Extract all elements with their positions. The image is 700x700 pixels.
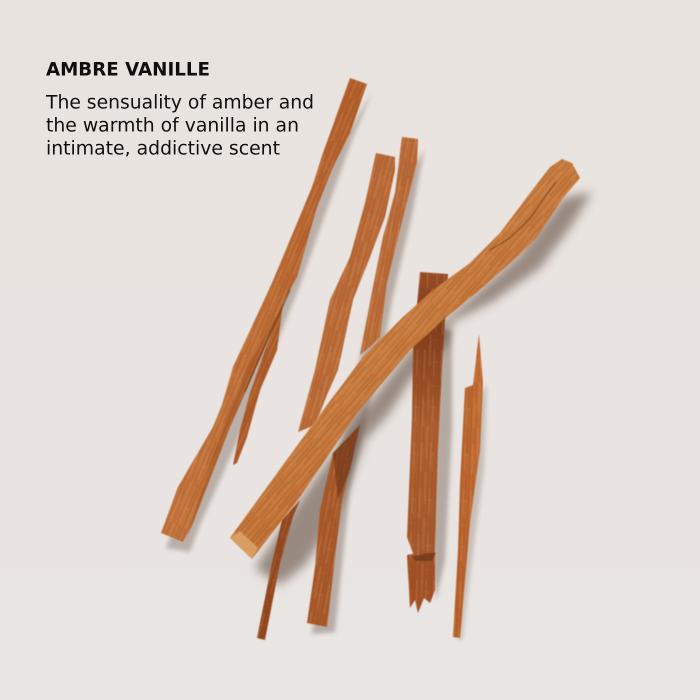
description: intimate, addictive scent bbox=[46, 138, 280, 160]
description bbox=[45, 92, 314, 160]
stick 6: large curved foreground stick bbox=[230, 159, 580, 559]
description: The sensuality of amber and bbox=[45, 92, 314, 114]
stick 2: middle stick passing behind bbox=[257, 153, 395, 640]
cast shadows bbox=[166, 92, 592, 640]
title: AMBRE VANILLE bbox=[46, 60, 210, 80]
stick 5: right splinter bbox=[453, 334, 483, 638]
stick 3: thin stick passing behind bbox=[307, 137, 418, 627]
description: the warmth of vanilla in an bbox=[46, 116, 299, 136]
stick 1: long left stick with splinter bbox=[161, 78, 367, 542]
stick 4: vertical broken stick bbox=[407, 272, 448, 613]
